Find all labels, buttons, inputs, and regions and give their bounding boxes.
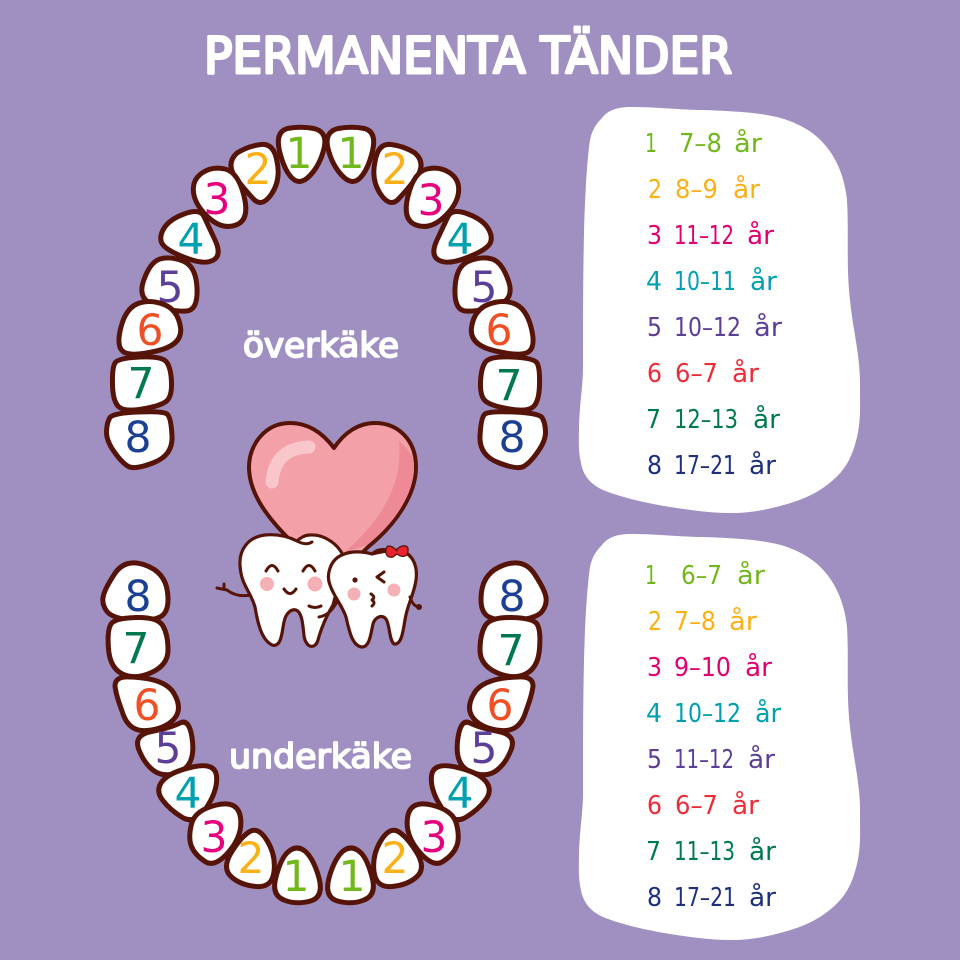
tooth: lower right 4: 4 bbox=[446, 769, 474, 819]
row: tooth 1 upper: 7–8 bbox=[679, 129, 722, 159]
row: tooth 1 lower bbox=[645, 560, 765, 591]
tooth: lower right 6: 6 bbox=[486, 681, 514, 731]
tooth: upper left 4: 4 bbox=[178, 215, 204, 265]
row: tooth 6 lower: 6 bbox=[647, 791, 662, 821]
row: tooth 8 upper: 17–21 bbox=[674, 451, 736, 481]
tooth: lower right 3 bbox=[407, 804, 458, 863]
tooth: lower right 3: 3 bbox=[420, 813, 448, 863]
tooth: upper left 7 bbox=[112, 357, 172, 410]
tooth: upper right 7 bbox=[480, 357, 540, 411]
row: tooth 8 lower bbox=[647, 882, 776, 913]
panel: upper jaw eruption ages bbox=[579, 107, 860, 513]
tooth: lower left 6 bbox=[115, 677, 178, 731]
tooth: lower right 8 bbox=[481, 563, 546, 622]
tooth: lower left 7 bbox=[108, 617, 168, 677]
tooth: upper right 3: 3 bbox=[418, 176, 444, 226]
tooth: upper right 2 bbox=[374, 144, 421, 203]
tooth: lower right 5: 5 bbox=[470, 724, 498, 774]
row: tooth 5 lower: 5 bbox=[647, 745, 662, 775]
row: tooth 3 upper: år bbox=[747, 220, 774, 251]
row: tooth 4 upper bbox=[646, 266, 777, 297]
character: large tooth bbox=[217, 535, 345, 646]
tooth: upper right 6 bbox=[471, 301, 533, 356]
tooth: lower left 1: 1 bbox=[282, 852, 310, 902]
tooth: upper left 8 bbox=[106, 412, 172, 468]
tooth: upper left 3 bbox=[193, 168, 246, 226]
row: tooth 5 upper: år bbox=[754, 312, 782, 343]
tooth: lower right 1 bbox=[328, 848, 373, 903]
tooth: upper left 5: 5 bbox=[156, 263, 184, 313]
row: tooth 4 lower: år bbox=[755, 698, 781, 729]
tooth: upper left 5 bbox=[142, 258, 197, 313]
row: tooth 1 upper: år bbox=[734, 128, 762, 159]
tooth: upper right 2: 2 bbox=[382, 145, 408, 195]
tooth: upper left 6 bbox=[119, 301, 181, 356]
tooth: lower right 2: 2 bbox=[382, 834, 408, 884]
tooth: lower left 2 bbox=[226, 830, 274, 887]
tooth: upper right 6: 6 bbox=[486, 306, 512, 356]
row: tooth 3 lower bbox=[647, 652, 772, 683]
row: tooth 1 lower: 1 bbox=[645, 561, 657, 591]
tooth: lower left 2: 2 bbox=[238, 834, 264, 884]
row: tooth 2 upper bbox=[648, 174, 760, 205]
tooth: lower left 5: 5 bbox=[154, 724, 182, 774]
row: tooth 1 lower: år bbox=[737, 560, 765, 591]
tooth: lower right 7: 7 bbox=[498, 626, 524, 676]
tooth: upper left 1: 1 bbox=[286, 129, 312, 179]
tooth: lower right 6 bbox=[470, 677, 533, 731]
row: tooth 6 upper: 6 bbox=[647, 359, 662, 389]
tooth: upper right 1: 1 bbox=[338, 129, 364, 179]
tooth: lower right 1: 1 bbox=[338, 852, 366, 902]
row: tooth 1 upper: 1 bbox=[645, 129, 657, 159]
row: tooth 4 upper: 10–11 bbox=[674, 267, 736, 297]
row: tooth 8 lower: 17–21 bbox=[674, 883, 736, 913]
row: tooth 3 lower: 9–10 bbox=[674, 653, 731, 683]
row: tooth 8 lower: 8 bbox=[647, 883, 662, 913]
row: tooth 6 upper: år bbox=[732, 358, 759, 389]
row: tooth 8 upper: år bbox=[749, 450, 776, 481]
tooth: upper right 4 bbox=[434, 212, 491, 265]
icon: red bow bbox=[386, 546, 408, 557]
row: tooth 2 lower: 7–8 bbox=[674, 607, 716, 637]
tooth: upper left 6: 6 bbox=[136, 306, 164, 356]
tooth: lower left 4: 4 bbox=[174, 769, 202, 819]
row: tooth 8 upper bbox=[647, 450, 776, 481]
row: tooth 4 lower bbox=[646, 698, 781, 729]
row: tooth 4 upper: år bbox=[750, 266, 777, 297]
tooth: upper right 7: 7 bbox=[496, 361, 522, 411]
tooth: lower left 8 bbox=[103, 563, 168, 622]
tooth: lower left 1 bbox=[275, 848, 320, 903]
row: tooth 7 upper bbox=[646, 404, 780, 435]
row: tooth 4 upper: 4 bbox=[646, 267, 662, 297]
row: tooth 3 upper: 3 bbox=[647, 221, 662, 251]
tooth: upper left 3: 3 bbox=[204, 175, 230, 225]
row: tooth 3 upper: 11–12 bbox=[674, 221, 734, 251]
title: PERMANENTA TÄNDER bbox=[204, 27, 732, 85]
tooth: lower left 3 bbox=[190, 804, 241, 863]
row: tooth 5 lower: 11–12 bbox=[674, 745, 734, 775]
row: tooth 4 lower: 10–12 bbox=[674, 699, 741, 729]
tooth: lower left 4 bbox=[159, 766, 217, 820]
row: tooth 4 lower: 4 bbox=[646, 699, 662, 729]
tooth: lower right 5 bbox=[457, 722, 512, 775]
upper jaw teeth bbox=[106, 127, 546, 468]
tooth: lower left 6: 6 bbox=[134, 681, 160, 731]
tooth: upper right 5 bbox=[455, 258, 510, 313]
tooth: lower right 4 bbox=[431, 766, 489, 820]
row: tooth 5 lower bbox=[647, 744, 775, 775]
row: tooth 1 lower: 6–7 bbox=[681, 561, 722, 591]
row: tooth 5 upper: 10–12 bbox=[674, 313, 741, 343]
tooth: upper right 3 bbox=[406, 168, 459, 226]
tooth: upper right 1 bbox=[327, 127, 374, 181]
tooth: upper left 4 bbox=[161, 212, 218, 265]
row: tooth 2 lower: 2 bbox=[648, 607, 662, 637]
tooth: upper left 8: 8 bbox=[124, 413, 152, 463]
row: tooth 7 upper: 7 bbox=[646, 405, 661, 435]
row: tooth 3 lower: 3 bbox=[647, 653, 662, 683]
tooth: upper left 2: 2 bbox=[244, 145, 272, 195]
row: tooth 7 lower bbox=[646, 836, 776, 867]
row: tooth 5 upper: 5 bbox=[647, 313, 662, 343]
tooth: lower left 8: 8 bbox=[124, 572, 152, 622]
row: tooth 7 upper: 12–13 bbox=[674, 405, 738, 435]
row: tooth 7 lower: 11–13 bbox=[674, 837, 735, 867]
tooth: upper left 2 bbox=[231, 144, 278, 203]
row: tooth 3 upper bbox=[647, 220, 774, 251]
tooth: upper right 8 bbox=[480, 412, 546, 468]
row: tooth 2 upper: 8–9 bbox=[675, 175, 718, 205]
row: tooth 8 lower: år bbox=[749, 882, 776, 913]
panel: lower jaw eruption ages bbox=[579, 534, 860, 940]
icon: heart bbox=[249, 423, 416, 575]
row: tooth 7 upper: år bbox=[753, 404, 780, 435]
row: tooth 5 upper bbox=[647, 312, 782, 343]
row: tooth 6 upper: 6–7 bbox=[675, 359, 718, 389]
row: tooth 6 lower: 6–7 bbox=[675, 791, 718, 821]
tooth: upper left 7: 7 bbox=[128, 359, 154, 409]
tooth: upper right 8: 8 bbox=[498, 413, 526, 463]
lower jaw teeth bbox=[103, 563, 546, 903]
tooth: lower left 3: 3 bbox=[200, 813, 228, 863]
row: tooth 6 lower: år bbox=[732, 790, 759, 821]
row: tooth 7 lower: 7 bbox=[646, 837, 661, 867]
tooth: lower right 7 bbox=[480, 617, 540, 677]
row: tooth 2 lower bbox=[648, 606, 757, 637]
row: tooth 7 lower: år bbox=[749, 836, 776, 867]
tooth: lower right 2 bbox=[374, 830, 422, 887]
tooth: upper right 4: 4 bbox=[446, 215, 474, 265]
row: tooth 2 upper: 2 bbox=[648, 175, 662, 205]
character: small tooth bbox=[328, 546, 422, 647]
tooth: lower left 7: 7 bbox=[122, 624, 150, 674]
row: tooth 6 upper bbox=[647, 358, 759, 389]
label: lower jaw: underkäke bbox=[229, 737, 412, 777]
tooth: upper right 5: 5 bbox=[470, 263, 498, 313]
tooth: lower left 5 bbox=[138, 722, 193, 775]
row: tooth 8 upper: 8 bbox=[647, 451, 662, 481]
row: tooth 3 lower: år bbox=[745, 652, 772, 683]
tooth: upper left 1 bbox=[278, 127, 325, 181]
row: tooth 2 lower: år bbox=[729, 606, 757, 637]
row: tooth 1 upper bbox=[645, 128, 762, 159]
illustration: two tooth characters with heart bbox=[217, 423, 422, 647]
label: upper jaw: överkäke bbox=[243, 326, 399, 366]
tooth: lower right 8: 8 bbox=[498, 572, 526, 622]
row: tooth 6 lower bbox=[647, 790, 759, 821]
row: tooth 5 lower: år bbox=[748, 744, 775, 775]
row: tooth 2 upper: år bbox=[733, 174, 760, 205]
